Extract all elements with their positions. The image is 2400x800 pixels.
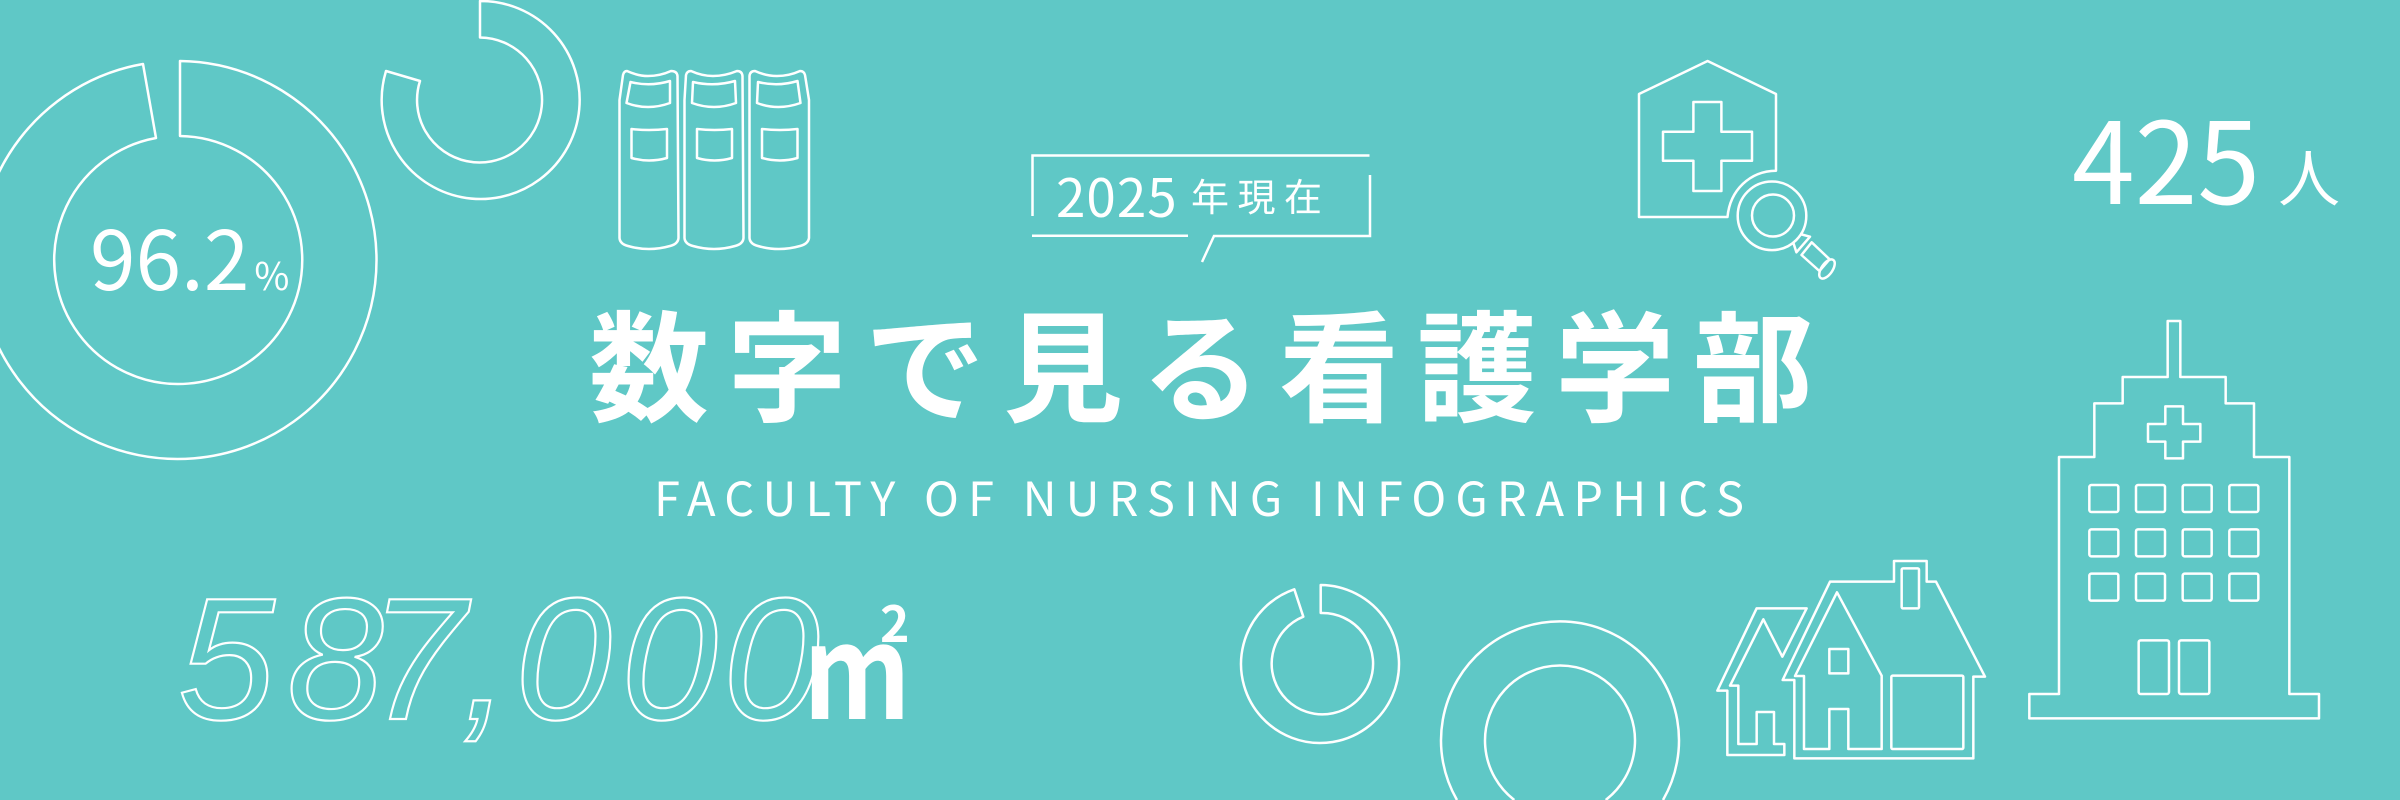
icon: hospital building: [2029, 321, 2319, 718]
speech bubble label: as of 2025: 年現在: [1191, 167, 1331, 222]
donut ring: [0, 61, 377, 459]
icon: hospital shield with magnifier: [1639, 61, 1838, 281]
value 425 people: 人: [2278, 129, 2340, 219]
decorative donut: top: [382, 1, 580, 199]
book 2: [684, 71, 744, 249]
large house outline: [1783, 561, 1985, 758]
magnifier lens: [1738, 182, 1806, 250]
outlined number: 587,000: [178, 561, 820, 756]
doors: [2139, 640, 2209, 694]
decorative donut: bottom centre: [1241, 585, 1399, 743]
decorative ring: bottom: [1441, 621, 1679, 800]
medical cross: [1663, 102, 1752, 191]
label text: 2025: [1056, 157, 1178, 233]
donut chart: 96.2%: [0, 61, 377, 459]
shield outline: [1639, 61, 1776, 217]
bubble outline: [1032, 156, 1370, 262]
building outline: [2029, 321, 2319, 718]
speech bubble label: as of 2025: [1032, 156, 1370, 262]
building cross: [2148, 406, 2200, 458]
value 96.2%: 96.2%: [90, 195, 289, 314]
small house: [1717, 608, 1807, 755]
subtitle: FACULTY OF NURSING INFOGRAPHICS: [654, 461, 1744, 530]
large house front: [1795, 592, 1882, 749]
garage: [1891, 676, 1963, 749]
unit superscript 2: 2: [880, 585, 910, 657]
icon: three books: [620, 71, 809, 249]
magnifier handle: [1793, 234, 1810, 252]
unit m: m: [803, 568, 911, 757]
book 3: [750, 71, 809, 249]
window: [1829, 649, 1848, 673]
windows: [2089, 485, 2258, 601]
title: 数字で見る看護学部: [589, 273, 1831, 447]
book 1: [620, 71, 678, 249]
icon: houses: [1717, 561, 1985, 758]
value 587,000 square metres: [178, 561, 911, 757]
chimney: [1902, 568, 1919, 608]
value 425 people: 425: [2072, 73, 2260, 237]
